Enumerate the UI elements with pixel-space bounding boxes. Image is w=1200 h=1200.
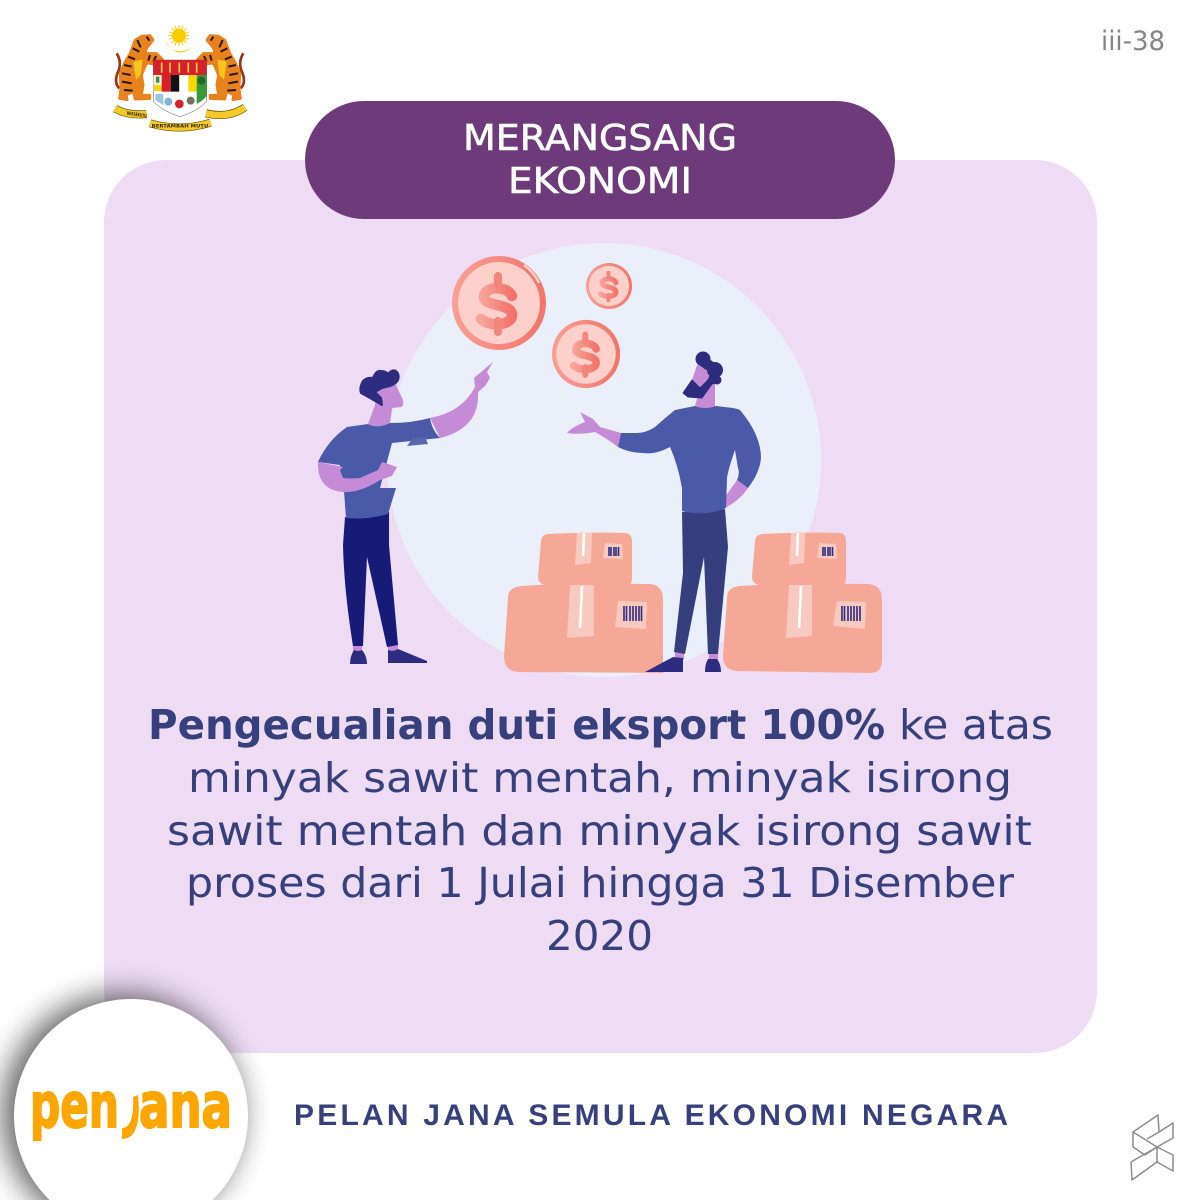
boxes: right stack [723, 533, 882, 673]
icon: small coin [586, 263, 632, 309]
body text: Pengecualian duti eksport 100% [148, 701, 885, 749]
boxes: left stack [504, 533, 663, 673]
page number: iii-38 [1101, 26, 1165, 57]
icon: corner logo [1131, 1115, 1173, 1180]
heading pill: Merangsang Ekonomi [305, 101, 895, 219]
penjana badge: ana [139, 1069, 232, 1142]
icon: Malaysia coat of arms [115, 25, 245, 129]
body text: 2020 [546, 912, 653, 960]
penjana badge [2, 994, 248, 1200]
right man [567, 352, 761, 672]
body text: ke atas [899, 701, 1053, 749]
ribbon and motto [115, 107, 245, 129]
left tiger [116, 35, 163, 100]
body text: proses dari 1 Julai hingga 31 Disember [186, 859, 1014, 907]
body text [148, 701, 1053, 960]
body text: sawit mentah dan minyak isirong sawit [167, 807, 1032, 855]
background circle [387, 243, 821, 677]
shield [153, 60, 207, 117]
icon: large coin [452, 256, 546, 350]
panel: main lilac card [104, 160, 1097, 1053]
sun and crescent [166, 25, 194, 52]
ribbon and motto: BERTAMBAH MUTU [152, 123, 209, 129]
heading pill: Merangsang Ekonomi: MERANGSANG [463, 118, 737, 159]
ribbon and motto: BERSEKUTU [126, 111, 147, 119]
left man [318, 362, 493, 664]
heading pill: Merangsang Ekonomi: EKONOMI [508, 161, 692, 202]
body text: minyak sawit mentah, minyak isirong [188, 754, 1012, 802]
footer tagline: PELAN JANA SEMULA EKONOMI NEGARA [294, 1099, 1008, 1132]
right tiger [197, 35, 244, 100]
illustration: two men, coins and boxes [318, 243, 882, 677]
icon: medium coin [552, 320, 620, 388]
penjana badge: pen [30, 1069, 119, 1142]
